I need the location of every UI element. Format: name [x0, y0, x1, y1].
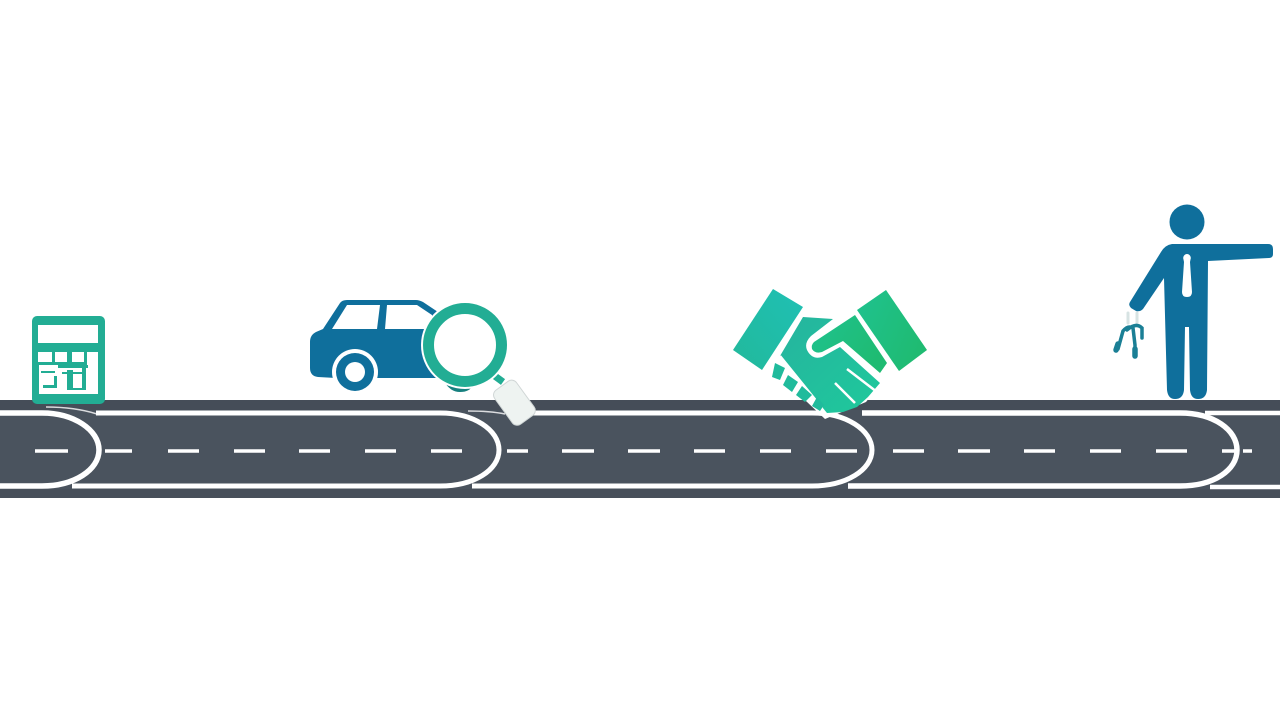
person: tie	[1182, 254, 1192, 297]
car: rear wheel	[444, 381, 473, 392]
road: thin merging strokes	[46, 407, 505, 414]
icon: car	[310, 300, 473, 395]
handshake: right cuff	[857, 290, 927, 371]
handshake: left hand	[780, 317, 880, 413]
handshake: right hand	[812, 315, 887, 373]
person: body and arms	[1129, 244, 1273, 399]
keys	[1116, 313, 1142, 356]
road: outline of first lane segment	[0, 413, 99, 486]
handshake: finger slits	[780, 356, 877, 408]
person: head	[1170, 204, 1204, 240]
icon: handshake	[733, 289, 927, 419]
car: side windows	[332, 305, 432, 329]
handshake: fingers	[772, 363, 824, 411]
car: front wheel	[332, 349, 378, 395]
icon: calculator	[32, 316, 105, 404]
handshake: left cuff	[733, 289, 803, 370]
road: centre dashes	[35, 449, 1252, 453]
icon: magnifying glass	[421, 301, 538, 428]
road	[0, 400, 1280, 498]
road: outline of fourth lane segment	[848, 413, 1237, 486]
icon: person pointing with keys	[1116, 204, 1273, 399]
road: start of fifth lane segment	[1205, 413, 1280, 487]
handshake: white backing	[768, 308, 893, 419]
road: outline of second lane segment	[72, 413, 499, 486]
road: outline of third lane segment	[472, 413, 872, 486]
